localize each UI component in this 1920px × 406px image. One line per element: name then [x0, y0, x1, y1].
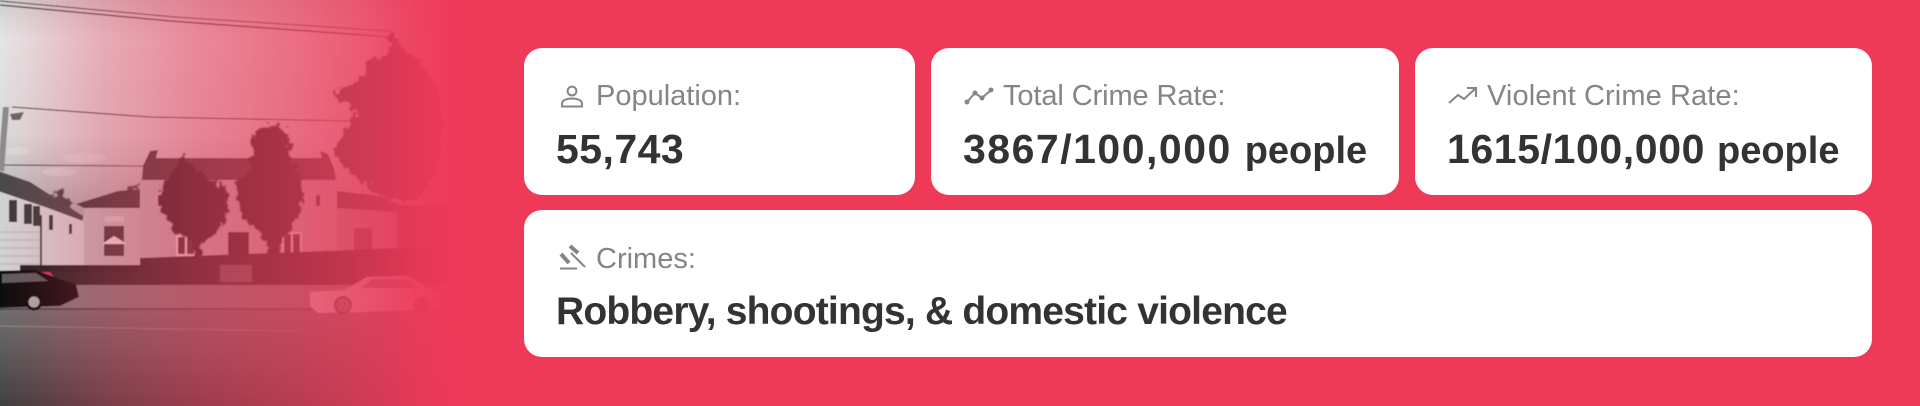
label: population: Population: — [596, 80, 741, 112]
street lamp — [0, 107, 24, 172]
icon: gavel — [560, 244, 586, 270]
trees in front of building — [158, 156, 228, 258]
value: crimes: Robbery, shootings, & domestic violence — [556, 290, 1287, 333]
large tree at right — [332, 28, 442, 202]
clouds — [6, 147, 107, 176]
label: total crime rate: Total Crime Rate: — [1003, 80, 1225, 112]
panel: population — [524, 48, 915, 195]
panel: total crime rate — [931, 48, 1399, 195]
value: total crime rate: 3867/100,000 people — [963, 126, 1367, 172]
background tree behind building — [50, 182, 142, 208]
power lines — [0, 1, 390, 166]
library: side wing right — [337, 208, 397, 268]
icon: trending up arrow — [1448, 87, 1477, 104]
left side house — [0, 172, 84, 272]
icon: line chart — [964, 88, 994, 104]
dark foliage backing right of the building — [390, 205, 490, 290]
red gradient overlay — [0, 0, 480, 406]
value: violent crime rate: 1615/100,000 people — [1447, 126, 1839, 172]
sky — [0, 0, 490, 230]
dark car — [0, 270, 79, 309]
label: crimes: Crimes: — [596, 243, 696, 275]
library: main block — [140, 172, 337, 265]
library: side wing left — [84, 208, 140, 265]
value: population: 55,743 — [556, 126, 684, 172]
hedge and fence — [50, 248, 490, 285]
white car — [310, 276, 442, 313]
label: violent crime rate: Violent Crime Rate: — [1487, 80, 1740, 112]
sidewalk and street — [0, 285, 490, 310]
photo: street scene with red gradient fade — [0, 0, 430, 406]
icon: person — [561, 86, 583, 108]
panel: violent crime rate — [1415, 48, 1872, 195]
panel: crimes — [524, 210, 1872, 357]
